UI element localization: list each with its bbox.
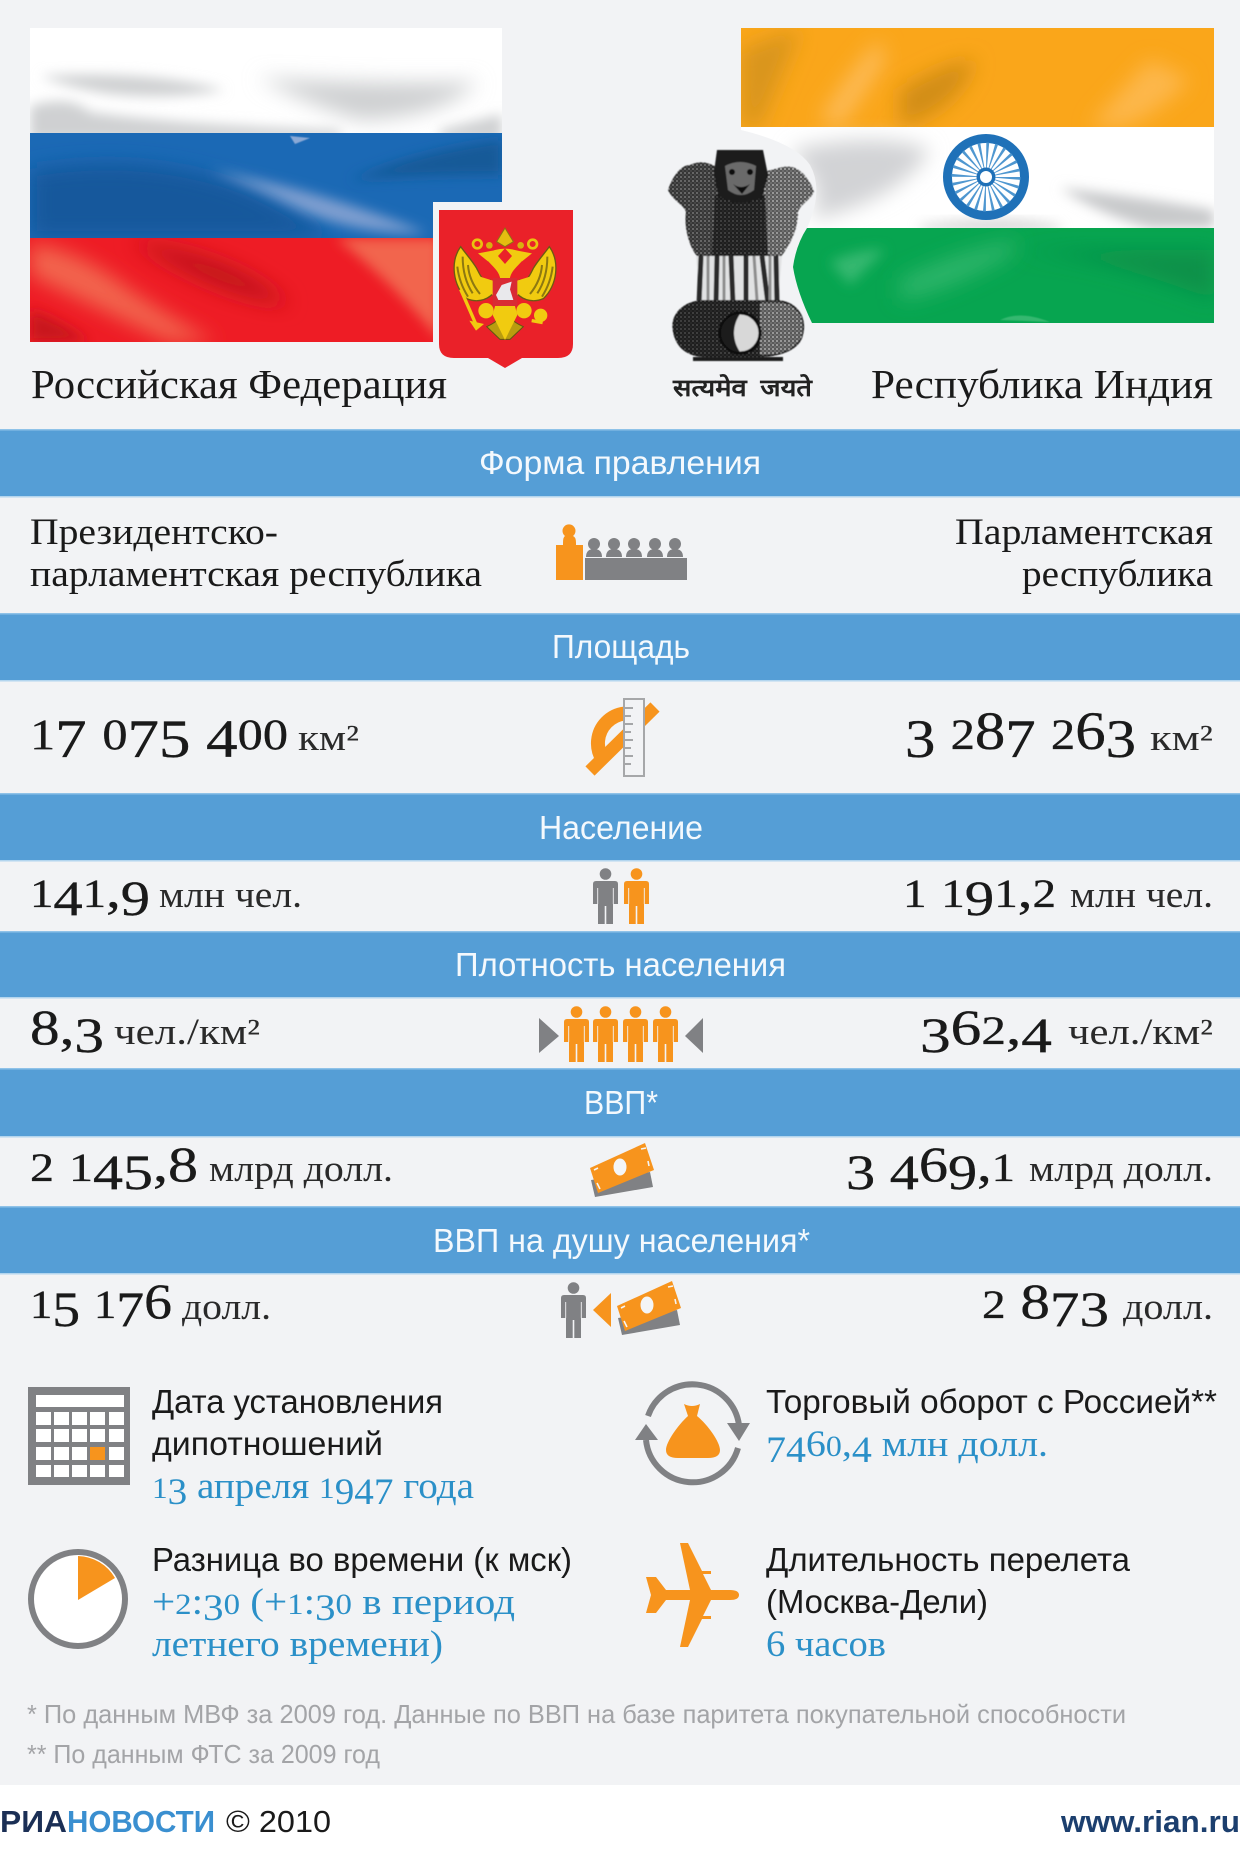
value: Russia population: 141,9 [30,862,150,926]
band: GDP per capita [0,1206,1240,1274]
value: Russia GDP: млрд долл. [209,1149,393,1190]
band: population density: Плотность населения [455,946,786,983]
value: India density [920,999,1213,1062]
text: Russia government: парламентская республика [30,554,482,595]
value: India population: млн чел. [1070,875,1213,916]
text: time value: летнего времени) [152,1624,443,1665]
value: India area: км² [1150,718,1213,759]
icon: Russian coat of arms [433,202,578,376]
value: India population: 1 191,2 [903,862,1056,926]
heading: Russian Federation name: Российская Федерация [31,361,447,407]
text: flight label: (Москва-Дели) [766,1583,988,1620]
text: Russia government: Президентско- [30,512,278,553]
value: Russia GDP per capita: долл. [182,1287,271,1328]
icon: Ashoka chakra [948,138,1024,216]
heading: Republic of India name: Республика Индия [871,361,1213,407]
band: area [0,613,1240,682]
panel: Russia flag [30,28,502,342]
icon: crowd between arrows [539,1006,703,1062]
value: India population [903,862,1213,926]
value: India area: 3 287 263 [905,701,1136,769]
value: Russia GDP [30,1136,393,1200]
band: population density [0,931,1240,998]
panel: India flag [741,28,1214,323]
value: India GDP per capita: 2 873 [982,1273,1109,1336]
row: area [30,699,1213,776]
row: GDP [30,1136,1213,1200]
value: India density: чел./км² [1068,1012,1213,1053]
panel: diplomatic relations date [28,1383,474,1513]
icon: parliament [556,524,687,580]
value: Russia population: млн чел. [159,875,302,916]
value: Russia GDP per capita: 15 176 [30,1273,172,1336]
text: flight label: Длительность перелета [766,1541,1131,1578]
band: GDP: ВВП* [584,1084,658,1121]
panel: flight duration [646,1541,1131,1665]
value: Russia density: 8,3 [30,999,104,1062]
icon: two people [593,868,649,924]
row: government form [30,512,1213,595]
band: area: Площадь [552,628,690,665]
logo: RIA Novosti: НОВОСТИ [67,1804,215,1839]
logo: RIA Novosti [0,1804,215,1839]
band: government form [0,429,1240,498]
value: Russia area: км² [298,718,359,759]
text: flight value: 6 часов [766,1624,886,1665]
band: government form: Форма правления [479,444,761,481]
text: date label: дипотношений [152,1425,383,1462]
logo: RIA Novosti: РИА [0,1804,67,1839]
value: Russia population [30,862,302,926]
icon: protractor and ruler [590,699,655,776]
value: Russia density [30,999,260,1062]
value: India GDP: млрд долл. [1029,1149,1213,1190]
band: GDP per capita: ВВП на душу населения* [433,1222,810,1259]
text: date label: Дата установления [152,1383,443,1420]
icon: calendar [28,1387,130,1485]
band: GDP [0,1068,1240,1138]
icon: money to person [561,1281,681,1338]
row: population density [30,999,1213,1062]
value: Russia GDP per capita [30,1273,271,1336]
text: trade label: Торговый оборот с Россией** [766,1383,1217,1420]
panel: time difference [31,1541,572,1665]
value: India density: 362,4 [920,999,1052,1062]
value: Russia area: 17 075 400 [30,701,288,769]
icon: airplane [646,1543,739,1647]
value: India GDP per capita [982,1273,1213,1336]
footnotes: ** По данным ФТС за 2009 год [27,1739,380,1769]
value: India GDP: 3 469,1 [846,1136,1015,1200]
text: India government: республика [1022,554,1213,595]
text: date value: 13 апреля 1947 года [152,1466,474,1513]
text: time value: +2:30 (+1:30 в период [152,1582,499,1629]
footnotes: * По данным МВФ за 2009 год. Данные по ВВП на базе паритета покупательной способности [27,1699,1126,1729]
value: India GDP [846,1136,1213,1200]
text: trade value: 7460,4 млн долл. [766,1424,1048,1471]
value: Russia area [30,701,359,769]
row: population [30,862,1213,926]
band: population [0,793,1240,862]
value: Russia density: чел./км² [114,1012,260,1053]
icon: clock [31,1552,125,1646]
motto: सत्यमेव जयते [672,374,813,402]
eagle: double-headed gold [454,228,556,340]
value: Russia GDP: 2 145,8 [30,1136,198,1200]
icon: money bag with arrows [635,1384,750,1482]
row: GDP per capita [30,1273,1213,1338]
footnotes [27,1699,1126,1769]
website: www.rian.ru [1060,1804,1240,1839]
text: India government: Парламентская [955,512,1213,553]
value: India GDP per capita: долл. [1123,1287,1213,1328]
band: population: Население [539,809,703,846]
icon: Indian state emblem [668,150,814,402]
icon: banknotes [590,1143,654,1197]
copyright: © 2010 [226,1804,331,1839]
footer [0,1785,1240,1850]
text: time label: Разница во времени (к мск) [152,1541,572,1578]
panel: trade turnover [635,1383,1217,1482]
